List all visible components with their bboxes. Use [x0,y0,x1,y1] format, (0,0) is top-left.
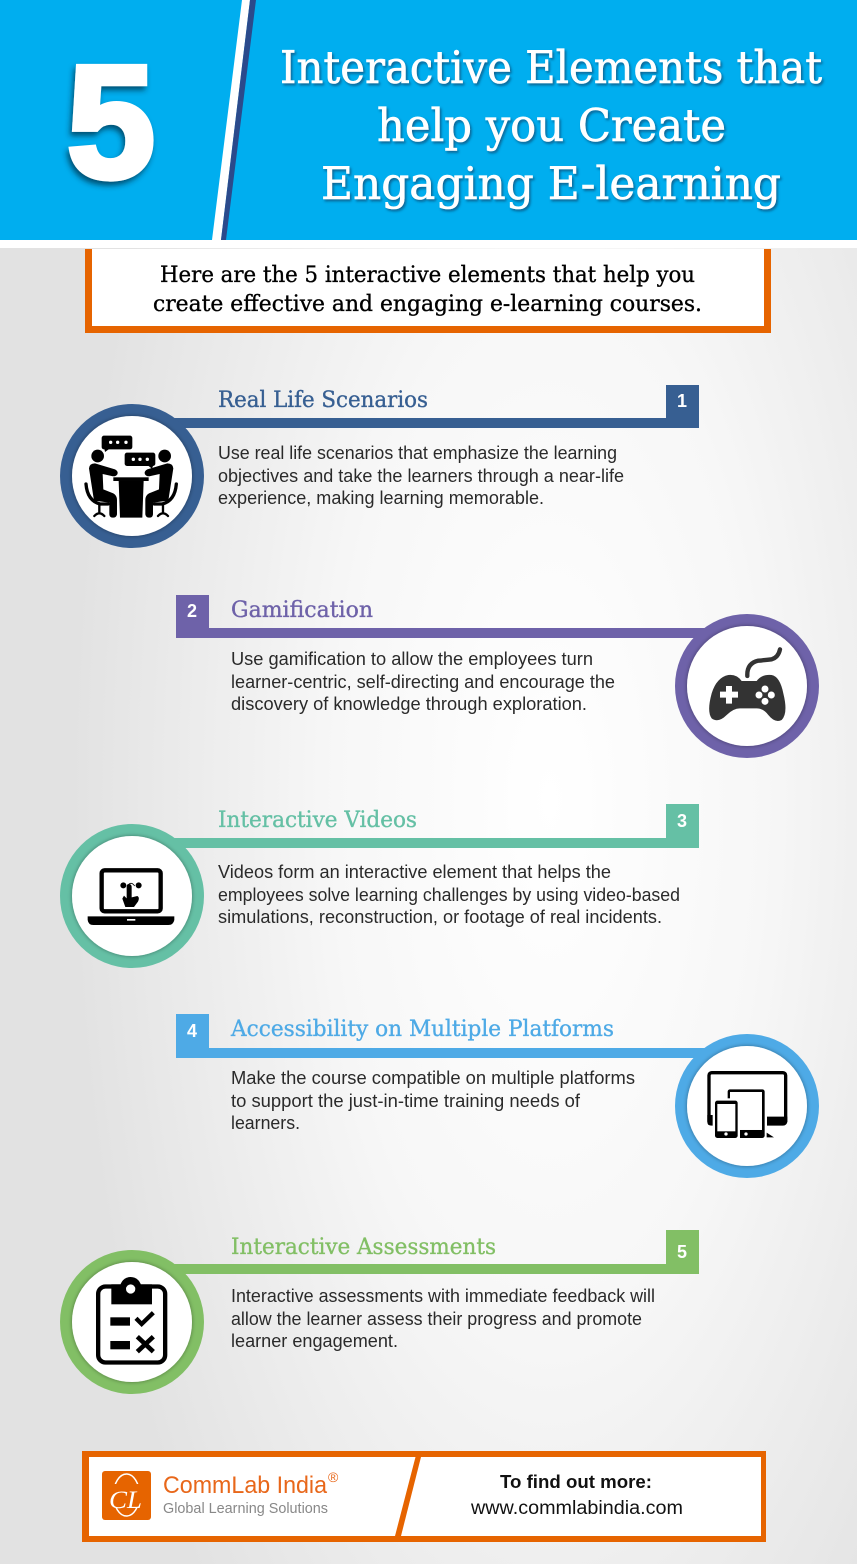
panel: accessibility on multiple platforms [176,1014,819,1178]
connector bar and number badge 2 [176,595,710,638]
title: help you Create [377,99,726,152]
body text: discovery of knowledge through exploration. [231,694,587,714]
footer call to action: www.commlabindia.com [470,1498,683,1519]
body text: Videos form an interactive element that helps the [218,862,611,882]
header slash divider [212,0,256,240]
icon circle: meeting at table [60,404,204,548]
body text: allow the learner assess their progress and promote [231,1309,642,1329]
logo: CommLab India: ® [328,1469,339,1485]
panel: interactive assessments [60,1230,699,1394]
connector bar and number badge 3 [170,804,699,848]
connector bar and number badge 3: 3 [677,811,687,831]
icon circle: game controller [675,614,819,758]
title [280,41,822,210]
heading: gamification: Gamification [231,598,373,623]
body text: to support the just-in-time training needs of [231,1091,581,1111]
body text [231,1068,635,1133]
body text: objectives and take the learners through a near-life [218,466,624,486]
panel: real life scenarios [60,385,699,548]
body text: Use gamification to allow the employees turn [231,649,593,669]
logo: CommLab India: Global Learning Solutions [163,1501,328,1517]
body text: simulations, reconstruction, or footage of real incidents. [218,907,662,927]
icon circle: clipboard checklist [60,1250,204,1394]
intro text: create effective and engaging e-learning courses. [153,292,702,317]
heading: real life scenarios: Real Life Scenarios [218,388,428,413]
body text: learners. [231,1113,300,1133]
connector bar and number badge 4: 4 [187,1021,197,1041]
heading: interactive videos: Interactive Videos [218,808,417,833]
heading: interactive assessments: Interactive Assessments [231,1235,496,1260]
body text: Use real life scenarios that emphasize the learning [218,443,617,463]
panel: gamification [176,595,819,758]
body text: Interactive assessments with immediate feedback will [231,1286,655,1306]
body text [218,443,624,508]
body text [231,1286,655,1351]
logo: CommLab India: CL [109,1487,142,1514]
title: Interactive Elements that [280,41,822,94]
big number 5: 5 [67,32,155,211]
icon circle: laptop with touch hand [60,824,204,968]
connector bar and number badge 1 [170,385,699,428]
footer box [82,1451,766,1542]
logo: CommLab India [102,1469,339,1520]
intro text [153,263,702,317]
footer call to action [470,1472,683,1519]
body text: experience, making learning memorable. [218,488,544,508]
connector bar and number badge 5 [170,1230,699,1274]
intro text: Here are the 5 interactive elements that help you [160,263,695,288]
body text: learner engagement. [231,1331,398,1351]
body text: employees solve learning challenges by using video-based [218,885,680,905]
panel: interactive videos [60,804,699,968]
title: Engaging E-learning [321,157,781,210]
body text: Make the course compatible on multiple platforms [231,1068,635,1088]
body text [218,862,680,927]
header banner [0,0,857,248]
logo: CommLab India: CommLab India [163,1472,328,1499]
body text [231,649,615,714]
footer call to action: To find out more: [500,1472,652,1492]
body text: learner-centric, self-directing and encourage the [231,672,615,692]
intro box [85,249,771,333]
connector bar and number badge 5: 5 [677,1242,687,1262]
connector bar and number badge 1: 1 [677,391,687,411]
icon circle: monitor, tablet and phone [675,1034,819,1178]
heading: accessibility on multiple platforms: Accessibility on Multiple Platforms [230,1017,614,1042]
connector bar and number badge 2: 2 [187,601,197,621]
connector bar and number badge 4 [176,1014,710,1058]
